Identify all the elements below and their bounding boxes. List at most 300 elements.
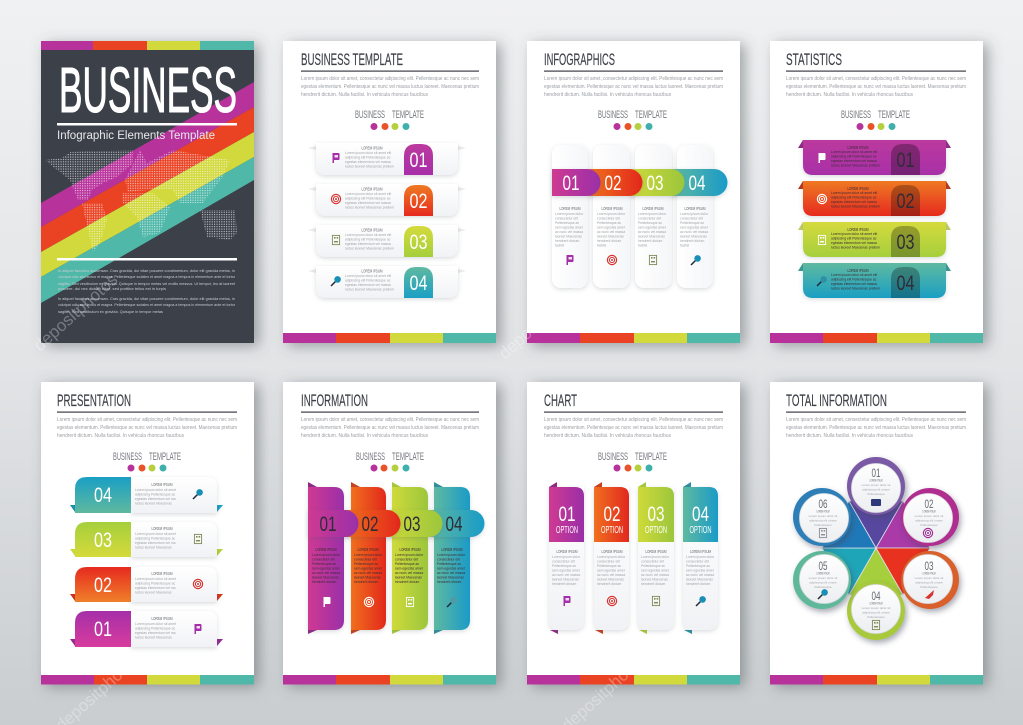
column 01: 01 xyxy=(320,513,336,536)
subheading: BUSINESS xyxy=(598,451,628,463)
card 02: LOREM IPSUM xyxy=(848,186,869,191)
segment 03: Pellentesque xyxy=(920,585,938,589)
column text 04: ac nunc vel massa xyxy=(680,230,708,234)
option card 02 xyxy=(594,482,629,634)
column text 04: laoreet Maecenas xyxy=(680,234,707,238)
segment 02: Lorem ipsum dolor sit xyxy=(915,514,944,518)
card 04: LOREM IPSUM xyxy=(362,268,383,274)
column 03: laoreet Maecenas xyxy=(395,576,422,580)
watermarks: depositphotos xyxy=(30,270,121,355)
column text 01: Lorem ipsum dolor xyxy=(555,212,584,216)
column 02: sem egestas amet xyxy=(354,566,382,570)
column text 01: ac nunc vel massa xyxy=(555,230,583,234)
cover body text: posuere, dui nec dictum vitae, sed porttitor tellus est in turpis xyxy=(58,286,166,291)
column text 04: sem egestas amet xyxy=(680,226,708,230)
intro text: egestas elementum. Pellentesque ac nunc vel massa luctus laoreet. Maecenas pretium xyxy=(301,84,479,90)
heading: INFOGRAPHICS xyxy=(544,50,615,69)
column text 01: hendrerit dictum xyxy=(555,239,579,243)
option card 02: hendrerit dictum xyxy=(597,582,621,586)
option card 04: sem egestas amet xyxy=(686,568,714,572)
column 03: hendrerit dictum xyxy=(395,580,419,584)
card 04: LOREM IPSUM xyxy=(152,482,173,487)
column 02: LOREM IPSUM xyxy=(358,547,379,552)
option card 02: ac nunc vel massa xyxy=(597,573,625,577)
column text 02: laoreet Maecenas xyxy=(597,234,624,238)
intro text: Lorem ipsum dolor sit amet, consectetur adipiscing elit. Pellentesque ac nunc nec sem xyxy=(786,76,966,82)
column 01: Pellentesque ac xyxy=(312,562,336,566)
card 03: adipiscing elit Pellentesque ac xyxy=(831,236,877,240)
card 02: egestas elementum vel massa xyxy=(831,200,877,204)
column text 03: hendrerit dictum xyxy=(638,239,662,243)
column text 02: Lorem ipsum dolor xyxy=(597,212,626,216)
subheading: BUSINESS xyxy=(841,109,871,121)
colour dots xyxy=(856,123,896,130)
intro text: Lorem ipsum dolor sit amet, consectetur adipiscing elit. Pellentesque ac nunc nec sem xyxy=(544,417,723,423)
column text 02 xyxy=(597,206,626,265)
card 02: adipiscing elit Pellentesque ac xyxy=(345,196,391,200)
segment 03: adipiscing elit ornare xyxy=(915,580,943,584)
column 03: ac nunc vel massa xyxy=(395,571,423,575)
segment 05: adipiscing elit ornare xyxy=(809,580,837,584)
intro text: hendrerit dictum. Nulla facilisi. In vehicula rhoncus faucibus xyxy=(301,433,428,439)
option card 02: sem egestas amet xyxy=(597,568,625,572)
option card 03: Lorem ipsum dolor xyxy=(641,555,670,559)
card 02: Lorem ipsum dolor sit amet xyxy=(135,577,176,581)
card 03: luctus laoreet Maecenas pretium xyxy=(345,246,394,250)
colour dots xyxy=(614,123,652,130)
option card 04: laoreet Maecenas xyxy=(686,578,713,582)
segment 04: LOREM IPSUM xyxy=(870,602,882,606)
segment 05: Lorem ipsum dolor sit xyxy=(809,576,838,580)
option card 04: ac nunc vel massa xyxy=(686,573,714,577)
segment 05: Pellentesque xyxy=(814,585,832,589)
column 02: 02 xyxy=(362,513,378,536)
card 04: Lorem ipsum dolor sit amet elit xyxy=(831,273,877,277)
column text 02: ac nunc vel massa xyxy=(597,230,625,234)
column text 03 xyxy=(638,206,667,265)
card 01: adipiscing Pellentesque ac xyxy=(135,626,175,630)
option card 02: OPTION xyxy=(601,524,623,536)
band 04: 04 xyxy=(688,172,706,195)
column text 01: Pellentesque ac xyxy=(555,221,579,225)
column 01: LOREM IPSUM xyxy=(316,547,337,552)
card 01: Lorem ipsum dolor sit amet elit xyxy=(831,150,877,154)
card 03: Lorem ipsum dolor sit amet elit xyxy=(345,233,391,237)
column text 04: facilisi xyxy=(680,244,689,248)
option card 01: consectetur elit xyxy=(552,560,575,564)
card 03: luctus laoreet Maecenas xyxy=(135,546,172,550)
column 02: Pellentesque ac xyxy=(354,562,378,566)
heading: BUSINESS TEMPLATE xyxy=(301,50,403,69)
intro text: egestas elementum. Pellentesque ac nunc vel massa luctus laoreet. Maecenas pretium xyxy=(786,425,966,431)
card 04: adipiscing elit Pellentesque ac xyxy=(345,278,391,282)
column 03: consectetur elit xyxy=(395,558,418,562)
subheading: TEMPLATE xyxy=(392,109,424,121)
segment 04: adipiscing elit ornare xyxy=(862,610,890,614)
column text 03: laoreet Maecenas xyxy=(638,234,665,238)
segment 02: 02 xyxy=(924,497,934,511)
column text 01: consectetur elit xyxy=(555,216,578,220)
option card 01: Pellentesque ac xyxy=(552,564,576,568)
column 04: Pellentesque ac xyxy=(437,562,461,566)
column text 01 xyxy=(555,206,584,265)
top colour bar xyxy=(41,41,254,50)
intro text: Lorem ipsum dolor sit amet, consectetur adipiscing elit. Pellentesque ac nunc nec sem xyxy=(301,417,479,423)
segment 06: 06 xyxy=(818,497,828,511)
bottom colour bar xyxy=(770,333,983,343)
column 02: Lorem ipsum dolor xyxy=(354,553,383,557)
card 02 xyxy=(798,181,951,216)
intro text xyxy=(786,417,966,439)
subheading: TEMPLATE xyxy=(149,451,181,463)
column 03: 03 xyxy=(404,513,420,536)
column cards xyxy=(552,145,713,288)
column text 03: LOREM IPSUM xyxy=(642,206,664,211)
option card 03: consectetur elit xyxy=(641,560,664,564)
card 02: adipiscing Pellentesque ac xyxy=(135,582,175,586)
card 04: egestas elementum vel ma xyxy=(135,497,176,501)
subheading: BUSINESS xyxy=(356,451,385,463)
option card 01: laoreet Maecenas xyxy=(552,578,579,582)
column 04: sem egestas amet xyxy=(437,566,465,570)
intro text: Lorem ipsum dolor sit amet, consectetur adipiscing elit. Pellentesque ac nunc nec sem xyxy=(786,417,966,423)
bottom colour bar xyxy=(283,675,496,684)
subheading: TEMPLATE xyxy=(392,451,424,463)
segment 02 xyxy=(901,488,959,546)
intro text: hendrerit dictum. Nulla facilisi. In vehicula rhoncus faucibus xyxy=(544,92,671,98)
card 02: LOREM IPSUM xyxy=(152,571,173,576)
card 04: LOREM IPSUM xyxy=(848,268,869,273)
cover body text: In aliquet faucibus accumsan. Cras gravida, dui vitae posuere condimentum, dolor elit gravida metus, in xyxy=(58,268,235,273)
heading: CHART xyxy=(544,391,577,410)
segment 01: 01 xyxy=(872,466,881,480)
card 04: adipiscing Pellentesque ac xyxy=(135,492,175,496)
column 02: laoreet Maecenas xyxy=(354,576,381,580)
band 03 xyxy=(630,169,684,196)
card 01 xyxy=(70,611,223,647)
column text 03: sem egestas amet xyxy=(638,226,666,230)
heading: PRESENTATION xyxy=(57,391,131,410)
panel: cover xyxy=(41,41,254,343)
card 01: egestas elementum vel ma xyxy=(135,631,176,635)
column 04: laoreet Maecenas xyxy=(437,576,464,580)
column 01: hendrerit dictum xyxy=(312,580,336,584)
segment 01: Lorem ipsum dolor sit xyxy=(862,483,890,487)
cover body text: volutpat odio sed lectus et magna. Pellentesque sodales et amet magna a tempus in elementum ante et tortor xyxy=(58,302,236,307)
column 03: sem egestas amet xyxy=(395,566,423,570)
title rule xyxy=(57,123,237,126)
option card 01: sem egestas amet xyxy=(552,568,580,572)
six-segment wheel xyxy=(793,457,959,640)
card 04 xyxy=(308,266,466,298)
card 03: LOREM IPSUM xyxy=(152,526,173,531)
card 01: Lorem ipsum dolor sit amet xyxy=(135,622,176,626)
column text 04 xyxy=(680,206,709,265)
option card 01: Lorem ipsum dolor xyxy=(552,555,581,559)
option card 04: OPTION xyxy=(690,524,712,536)
diagonal stripes xyxy=(41,82,254,303)
column text 04: LOREM IPSUM xyxy=(684,206,706,211)
option card 03: OPTION xyxy=(645,524,667,536)
intro text: Lorem ipsum dolor sit amet, consectetur adipiscing elit. Pellentesque ac nunc nec sem xyxy=(301,76,479,82)
column text 02: Pellentesque ac xyxy=(597,221,621,225)
option card 03: laoreet Maecenas xyxy=(641,578,668,582)
intro text: hendrerit dictum. Nulla facilisi. In vehicula rhoncus faucibus xyxy=(786,92,913,98)
segment 04: Lorem ipsum dolor sit xyxy=(862,606,890,610)
column 02: consectetur elit xyxy=(354,558,377,562)
card 01 xyxy=(308,143,466,175)
heading: TOTAL INFORMATION xyxy=(786,391,887,410)
card 02: 02 xyxy=(410,190,428,213)
card 04: 04 xyxy=(410,272,428,295)
option card 04: Pellentesque ac xyxy=(686,564,710,568)
bottom colour bar xyxy=(527,675,740,684)
card 01: luctus laoreet Maecenas xyxy=(135,636,172,640)
heading: INFORMATION xyxy=(301,391,368,410)
option card 01: hendrerit dictum xyxy=(552,582,576,586)
cover subtitle: Infographic Elements Template xyxy=(57,130,215,142)
column 02: hendrerit dictum xyxy=(354,580,378,584)
option card 04: 04 xyxy=(692,503,709,526)
card 02: luctus laoreet Maecenas xyxy=(135,590,172,594)
option card 03: hendrerit dictum xyxy=(641,582,665,586)
card 03: 03 xyxy=(410,231,428,254)
card 03: Lorem ipsum dolor sit amet elit xyxy=(831,232,877,236)
card 03: egestas elementum vel massa xyxy=(831,241,877,245)
column 04 xyxy=(428,482,484,634)
panel: statistics xyxy=(770,41,983,343)
column text 03: consectetur elit xyxy=(638,216,661,220)
intro text: hendrerit dictum. Nulla facilisi. In vehicula rhoncus faucibus xyxy=(57,433,184,439)
card 01 xyxy=(798,140,951,175)
card 02: Lorem ipsum dolor sit amet elit xyxy=(831,191,877,195)
colour dots xyxy=(370,464,410,472)
column text 03: ac nunc vel massa xyxy=(638,230,666,234)
column 03: Pellentesque ac xyxy=(395,562,419,566)
segment 01: Pellentesque xyxy=(867,492,885,496)
card 04: adipiscing elit Pellentesque ac xyxy=(831,278,877,282)
panel: total information xyxy=(770,382,983,684)
column text 02: facilisi xyxy=(597,244,606,248)
column text 03: Lorem ipsum dolor xyxy=(638,212,667,216)
option card 03: LOREM IPSUM xyxy=(646,549,667,554)
colour dots xyxy=(614,464,652,472)
option card 02: 02 xyxy=(604,503,620,526)
subheading: TEMPLATE xyxy=(635,451,667,463)
panel: presentation xyxy=(41,382,254,684)
segment 03: Lorem ipsum dolor sit xyxy=(915,576,944,580)
column 04: LOREM IPSUM xyxy=(442,547,463,552)
column text 04: Pellentesque ac xyxy=(680,221,704,225)
card 01: Lorem ipsum dolor sit amet elit xyxy=(345,151,391,155)
bottom colour bar xyxy=(283,333,496,343)
card 02: Lorem ipsum dolor sit amet elit xyxy=(345,192,391,196)
segment 03: 03 xyxy=(924,559,934,573)
column 04: hendrerit dictum xyxy=(437,580,461,584)
cover title: BUSINESS xyxy=(59,54,237,126)
card 03: egestas elementum vel ma xyxy=(135,541,176,545)
intro text: hendrerit dictum. Nulla facilisi. In vehicula rhoncus faucibus xyxy=(544,433,671,439)
card 04: Lorem ipsum dolor sit amet elit xyxy=(345,274,391,278)
card 03: luctus laoreet Maecenas pretium xyxy=(831,246,880,250)
card 04: luctus laoreet Maecenas pretium xyxy=(831,286,880,290)
card 01: LOREM IPSUM xyxy=(152,616,173,621)
segment 02: Pellentesque xyxy=(920,523,938,527)
column 02 xyxy=(344,482,400,634)
option card 04: consectetur elit xyxy=(686,560,709,564)
card 03 xyxy=(798,222,951,257)
option card 01: ac nunc vel massa xyxy=(552,573,580,577)
column text 03: Pellentesque ac xyxy=(638,221,662,225)
column text 01: laoreet Maecenas xyxy=(555,234,582,238)
option card 03 xyxy=(638,482,674,634)
card 04: luctus laoreet Maecenas xyxy=(135,502,172,506)
segment 04 xyxy=(847,582,905,640)
option card 03: 03 xyxy=(648,503,664,526)
column 01: Lorem ipsum dolor xyxy=(312,553,341,557)
card 04: egestas elementum vel massa xyxy=(831,282,877,286)
intro text: Lorem ipsum dolor sit amet, consectetur adipiscing elit. Pellentesque ac nunc nec sem xyxy=(544,76,723,82)
panel: chart xyxy=(527,382,740,684)
card 01: adipiscing elit Pellentesque ac xyxy=(831,154,877,158)
segment 06 xyxy=(793,488,851,546)
card 02 xyxy=(308,184,466,216)
option card 03: ac nunc vel massa xyxy=(641,573,669,577)
segment 03: LOREM IPSUM xyxy=(922,572,936,576)
card 03: LOREM IPSUM xyxy=(362,228,383,232)
column text 03: facilisi xyxy=(638,244,647,248)
column text 01: LOREM IPSUM xyxy=(560,206,581,211)
card 01: LOREM IPSUM xyxy=(848,145,869,150)
option card 02: Lorem ipsum dolor xyxy=(597,555,626,559)
column text 02: consectetur elit xyxy=(597,216,620,220)
subheading: BUSINESS xyxy=(113,451,142,463)
card 04: 04 xyxy=(94,484,112,507)
card 01: egestas elementum vel massa xyxy=(345,160,391,164)
column text 04: Lorem ipsum dolor xyxy=(680,212,709,216)
option card 02: laoreet Maecenas xyxy=(597,578,624,582)
card 02: 02 xyxy=(94,574,112,597)
option card 04 xyxy=(683,482,718,634)
intro text xyxy=(301,76,479,98)
bottom colour bar xyxy=(770,675,983,684)
cover body text: In aliquet faucibus accumsan. Cras gravida, dui vitae posuere condimentum, dolor elit gravida metus, in xyxy=(58,296,235,301)
column text 02: LOREM IPSUM xyxy=(602,206,623,211)
column 01: consectetur elit xyxy=(312,558,335,562)
segment 06: Lorem ipsum dolor sit xyxy=(809,514,838,518)
band 02 xyxy=(589,169,642,196)
segment 05 xyxy=(793,551,851,609)
intro text: egestas elementum. Pellentesque ac nunc vel massa luctus laoreet. Maecenas pretium xyxy=(57,425,237,431)
band 01 xyxy=(552,169,600,196)
intro text xyxy=(544,417,723,439)
watermarks xyxy=(30,270,649,725)
segment 05: 05 xyxy=(818,559,828,573)
card 04: luctus laoreet Maecenas pretium xyxy=(345,288,394,292)
card 02: adipiscing elit Pellentesque ac xyxy=(831,196,877,200)
card 03: LOREM IPSUM xyxy=(848,227,869,232)
card 04: egestas elementum vel massa xyxy=(345,283,391,287)
card 04 xyxy=(798,263,951,298)
intro text: egestas elementum. Pellentesque ac nunc vel massa luctus laoreet. Maecenas pretium xyxy=(544,425,723,431)
segment 03 xyxy=(901,551,959,609)
bottom colour bar xyxy=(41,675,254,684)
card 03: Lorem ipsum dolor sit amet xyxy=(135,532,176,536)
intro text xyxy=(57,417,237,439)
segment 05: LOREM IPSUM xyxy=(816,572,830,576)
column text 02: sem egestas amet xyxy=(597,226,625,230)
option card 02: consectetur elit xyxy=(597,560,620,564)
option card 02: Pellentesque ac xyxy=(597,564,621,568)
card 03: adipiscing Pellentesque ac xyxy=(135,536,175,540)
intro text: hendrerit dictum. Nulla facilisi. In vehicula rhoncus faucibus xyxy=(786,433,913,439)
watermarks: depositphotos xyxy=(495,278,586,363)
band 04 xyxy=(672,169,728,196)
card 02: 02 xyxy=(896,190,914,213)
column 03: LOREM IPSUM xyxy=(400,547,421,552)
cover body text: sagittis. Sed vestibulum ex gravida. Quisque in tempor metas xyxy=(58,309,163,314)
card 01: luctus laoreet Maecenas pretium xyxy=(831,164,880,168)
column 03 xyxy=(386,482,442,634)
panel: information xyxy=(283,382,496,684)
card 03: 03 xyxy=(896,231,914,254)
cover body text xyxy=(58,268,236,314)
column 04: 04 xyxy=(446,513,463,536)
segment 02: adipiscing elit ornare xyxy=(915,518,943,522)
intro text xyxy=(301,417,479,439)
option card 01: 01 xyxy=(558,503,576,526)
subheading: BUSINESS xyxy=(598,109,628,121)
option card 02: LOREM IPSUM xyxy=(602,549,623,554)
intro text: Lorem ipsum dolor sit amet, consectetur adipiscing elit. Pellentesque ac nunc nec sem xyxy=(57,417,237,423)
card 01: luctus laoreet Maecenas pretium xyxy=(345,164,394,168)
column 01 xyxy=(308,482,358,634)
option card 04: hendrerit dictum xyxy=(686,582,710,586)
option card 03: Pellentesque ac xyxy=(641,564,665,568)
column 01: sem egestas amet xyxy=(312,566,340,570)
column 01: ac nunc vel massa xyxy=(312,571,340,575)
card 03: adipiscing elit Pellentesque ac xyxy=(345,238,391,242)
option card 03: sem egestas amet xyxy=(641,568,669,572)
column text 01: facilisi xyxy=(555,244,564,248)
card 01: 01 xyxy=(410,149,428,172)
column text 02: hendrerit dictum xyxy=(597,239,621,243)
cover body text: sagittis. Sed vestibulum ex gravida. Quisque in tempor metas vel mollis messus. Ut tempor, leo at laoreet xyxy=(58,281,236,286)
card 04: Lorem ipsum dolor sit amet xyxy=(135,488,176,492)
segment 01 xyxy=(847,457,905,515)
option card 04: Lorem ipsum dolor xyxy=(686,555,715,559)
heading: STATISTICS xyxy=(786,50,842,69)
option card 01: OPTION xyxy=(556,524,578,536)
column text 04: consectetur elit xyxy=(680,216,703,220)
panel: infographics xyxy=(527,41,740,343)
option card 04: LOREM IPSUM xyxy=(690,549,711,554)
card 02: luctus laoreet Maecenas pretium xyxy=(831,204,880,208)
panel: business template xyxy=(283,41,496,343)
card 01: 01 xyxy=(94,618,112,641)
column 04: Lorem ipsum dolor xyxy=(437,553,466,557)
subheading: TEMPLATE xyxy=(635,109,667,121)
card 01: LOREM IPSUM xyxy=(362,146,383,150)
wheel wedges xyxy=(822,501,930,595)
option card 01 xyxy=(549,482,584,634)
colour dots xyxy=(370,123,410,130)
card 02: egestas elementum vel ma xyxy=(135,586,176,590)
subheading: TEMPLATE xyxy=(878,109,910,121)
intro text: egestas elementum. Pellentesque ac nunc vel massa luctus laoreet. Maecenas pretium xyxy=(544,84,723,90)
band 02: 02 xyxy=(604,172,622,195)
card 03: 03 xyxy=(94,529,112,552)
